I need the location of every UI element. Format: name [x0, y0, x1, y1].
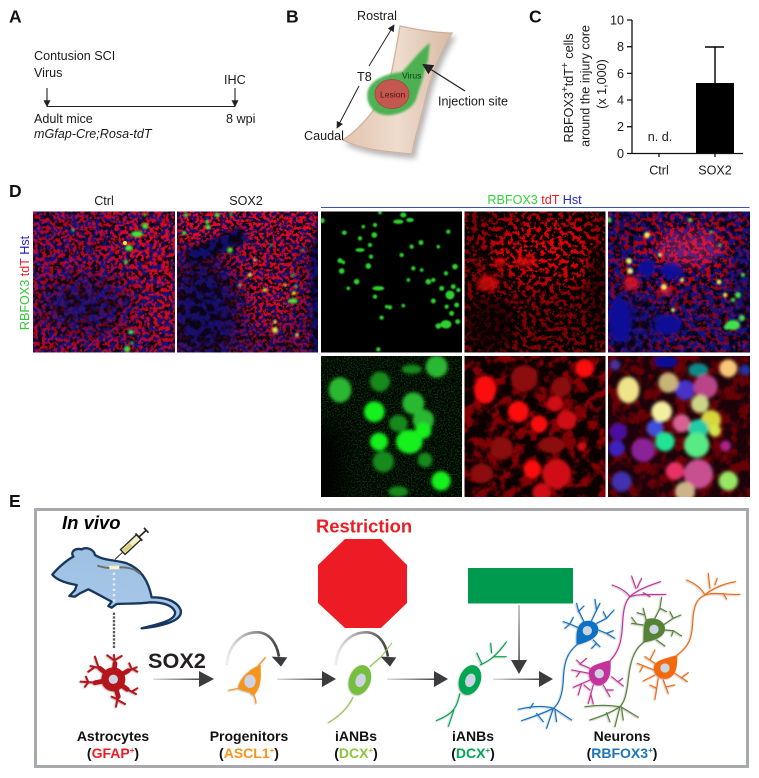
neurons label: + [648, 746, 653, 755]
x labels: SOX2 [698, 164, 732, 178]
astrocytes label: Astrocytes [77, 728, 149, 744]
progenitors label: ) [274, 745, 279, 761]
progenitors label: (ASCL1 [219, 745, 270, 761]
y axis title: + [560, 62, 571, 68]
progenitors label: Progenitors [210, 728, 288, 744]
y axis title: around the injury core [578, 25, 592, 147]
micrograph: tdT close-up [464, 356, 606, 502]
blue neuron [518, 599, 615, 728]
olive neuron [585, 597, 682, 727]
curved arrow: progenitor self-renewal [227, 632, 287, 667]
first iANBs label [334, 728, 378, 761]
axes [627, 20, 743, 157]
micrograph: RBFOX3 field [320, 211, 462, 353]
orange neuron [637, 573, 740, 699]
virus label: Virus [402, 70, 421, 80]
second iANBs label: (DCX [451, 745, 485, 761]
micrograph: merged field [606, 211, 750, 353]
astrocytes label: (GFAP [87, 745, 130, 761]
y tick labels: 8 [617, 40, 624, 54]
not detected label: n. d. [648, 130, 672, 144]
injection site label: Injection site [438, 94, 508, 108]
stage labels [77, 728, 657, 761]
astrocytes label [77, 728, 149, 761]
first iANBs label: + [368, 746, 373, 755]
panel C: bar chart [560, 14, 743, 178]
neurons label [587, 728, 657, 761]
icon: astrocyte [81, 655, 137, 707]
panel label C: C [529, 6, 542, 26]
y axis title [560, 25, 609, 147]
syringe [112, 527, 150, 563]
rostral label: Rostral [357, 9, 397, 23]
in vivo heading: In vivo [62, 512, 121, 533]
time point label: 8 wpi [226, 112, 255, 126]
arrow to neurons [493, 671, 553, 687]
progenitors label [210, 728, 288, 761]
icon: light green iANB cell [328, 657, 382, 723]
Ctrl heading: Ctrl [94, 194, 114, 208]
light green process above cell [381, 643, 392, 657]
neurons label: (RBFOX3 [587, 745, 648, 761]
icon: green iANB cell [436, 642, 507, 727]
panel label A: A [9, 6, 22, 26]
second iANBs label: ) [490, 745, 495, 761]
micrograph: SOX2 merge [177, 211, 318, 353]
arrow to progenitors [153, 671, 214, 687]
first iANBs label: iANBs [335, 728, 377, 744]
panel E: reprogramming schematic [36, 510, 748, 766]
icon: neurons cluster [518, 573, 740, 728]
SOX2 heading: SOX2 [229, 194, 263, 208]
second iANBs label: iANBs [452, 728, 494, 744]
icon: progenitor cell [228, 657, 266, 704]
astrocytes label: ) [134, 745, 139, 761]
x labels: Ctrl [649, 164, 669, 178]
channel legend top: RBFOX3 tdT Hst [487, 193, 582, 207]
arrows between stages [148, 605, 553, 687]
panel label D: D [9, 181, 22, 201]
mouse body [52, 548, 181, 628]
virus spread [367, 43, 430, 115]
injection point [109, 566, 119, 569]
panel label B: B [286, 6, 299, 26]
green blocking rectangle [468, 568, 573, 604]
panel D column headings [18, 193, 750, 330]
lesion [375, 80, 409, 108]
y tick labels: 4 [617, 94, 624, 108]
panel A: experimental timeline [34, 49, 255, 141]
arrow to second iANBs [387, 671, 448, 687]
curved arrow: iANB self-renewal [336, 632, 396, 667]
timeline axis and arrows [47, 88, 235, 106]
neurons label: Neurons [594, 728, 651, 744]
panel B: spinal cord injection diagram [304, 9, 508, 154]
y axis title: (x 1,000) [595, 59, 609, 109]
micrograph: Ctrl merge [33, 211, 175, 353]
y axis title: + [560, 86, 571, 92]
micrograph: RBFOX3 close-up [321, 356, 462, 497]
spinal cord segment [343, 26, 452, 154]
dotted line inside mouse [110, 573, 117, 602]
virus label: Virus [34, 66, 62, 80]
SOX2 label: SOX2 [148, 648, 206, 673]
y tick labels: 0 [617, 147, 624, 161]
adult mice label: Adult mice [34, 112, 93, 126]
second iANBs label: + [485, 746, 490, 755]
y tick labels: 2 [617, 120, 624, 134]
y axis title: RBFOX3 [562, 92, 576, 142]
frame [36, 510, 748, 766]
spinal cord line [97, 566, 140, 574]
arrow from green rectangle [511, 605, 527, 674]
T8 label: T8 [357, 70, 372, 84]
timeline labels before the axis: Contusion SCI [34, 49, 115, 63]
mouse genotype: mGfap-Cre;Rosa-tdT [34, 127, 153, 141]
channel legend rotated: RBFOX3 tdT Hst [18, 235, 32, 330]
caudal label: Caudal [304, 129, 344, 143]
dotted connector to astrocyte [110, 613, 117, 649]
neurons label: ) [653, 745, 657, 761]
rostral-caudal arrow [337, 25, 394, 128]
micrograph: tdT field [464, 211, 606, 353]
progenitors label: + [270, 746, 275, 755]
astrocytes label: + [130, 746, 135, 755]
panel label E: E [9, 491, 21, 511]
stop sign octagon [318, 539, 407, 628]
micrograph: merged close-up [608, 356, 750, 502]
second iANBs label [451, 728, 495, 761]
restriction heading: Restriction [316, 516, 412, 536]
magenta neuron [572, 576, 666, 704]
y tick labels: 10 [610, 14, 624, 28]
x labels [649, 164, 732, 178]
y tick labels: 6 [617, 67, 624, 81]
first iANBs label: ) [373, 745, 378, 761]
icon: mouse with syringe [52, 527, 181, 649]
y axis title: cells [562, 34, 576, 62]
heading rule [321, 206, 750, 208]
arrow to first iANBs [277, 671, 336, 687]
IHC label: IHC [224, 73, 246, 87]
first iANBs label: (DCX [334, 745, 368, 761]
SOX2 bar with error bar [696, 47, 734, 153]
injection site arrow [423, 64, 465, 91]
lesion label: Lesion [380, 90, 406, 100]
y axis title: tdT [562, 68, 576, 86]
y tick labels [610, 14, 624, 161]
